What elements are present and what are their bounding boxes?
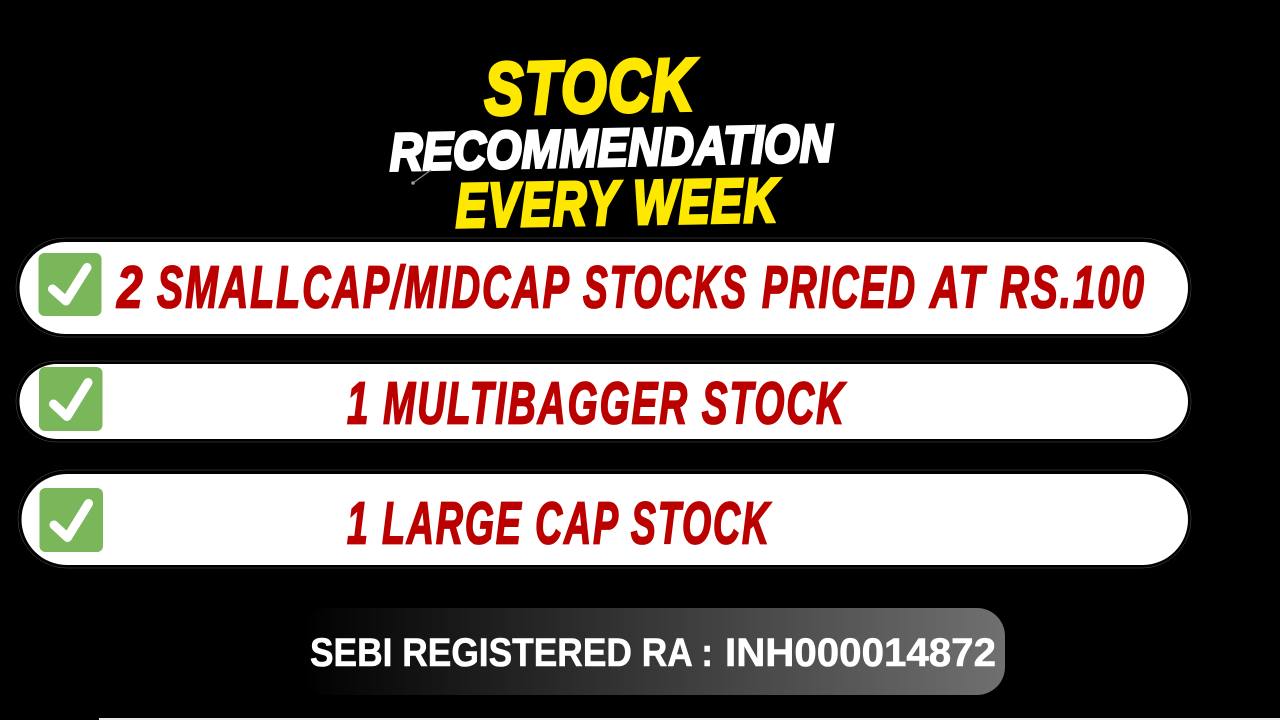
- item text: STOCKS: [583, 254, 748, 320]
- badge text: SEBI REGISTERED RA :: [310, 631, 713, 675]
- item text: 1 MULTIBAGGER STOCK: [347, 370, 847, 436]
- title: stock recommendation every week: [389, 43, 835, 241]
- icon: green check: [40, 488, 103, 552]
- item text: [116, 254, 1146, 320]
- panel: multibagger item: [16, 361, 1191, 442]
- badge: sebi registration: [300, 608, 1005, 695]
- panel: smallcap midcap item: [16, 238, 1191, 337]
- item text: SMALLCAP/MIDCAP: [157, 254, 571, 320]
- badge text: INH000014872: [725, 631, 996, 675]
- title line: every week: EVERY WEEK: [455, 166, 781, 241]
- stray connector mark: [411, 170, 431, 185]
- icon: green check: [39, 367, 102, 431]
- title line: stock: STOCK: [483, 43, 698, 130]
- icon: green check: [38, 253, 102, 316]
- title line: recommendation: RECOMMENDATION: [389, 114, 835, 182]
- panel: large cap item: [18, 470, 1191, 568]
- item text: PRICED: [762, 254, 917, 320]
- item text: RS.100: [1000, 254, 1146, 320]
- badge text: [310, 631, 996, 675]
- item text: 2: [116, 254, 145, 320]
- item text: 1 LARGE CAP STOCK: [347, 490, 772, 556]
- item text: AT: [929, 254, 987, 320]
